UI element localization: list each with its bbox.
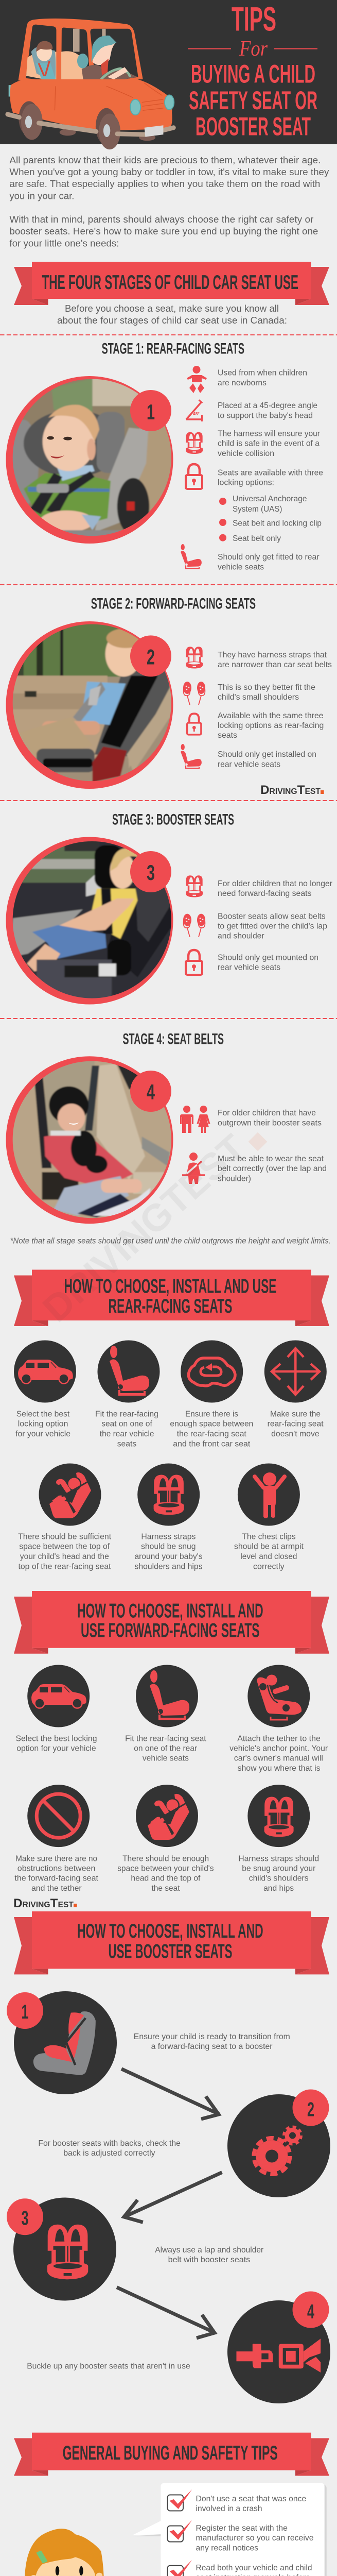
flow text 1: Ensure your child is ready to transition from bbox=[134, 2032, 290, 2041]
list text: and shoulder bbox=[218, 932, 264, 941]
ribbon heading: rear-facing bbox=[14, 1269, 329, 1326]
stage 2 number badge: 2 bbox=[147, 645, 155, 669]
number badge: 4 bbox=[307, 2301, 314, 2323]
step: fit on rear seat: seats bbox=[117, 1439, 136, 1448]
step text: rear-facing seat bbox=[268, 1420, 324, 1429]
step: seat doesn't move bbox=[264, 1341, 327, 1402]
list text: vehicle collision bbox=[218, 449, 274, 458]
header panel bbox=[0, 0, 337, 144]
step: head space: your child's head and the bbox=[20, 1552, 109, 1561]
step: attach tether: Attach the tether to the bbox=[237, 1734, 321, 1743]
tip 3 bbox=[168, 2560, 312, 2576]
logo: DrivingTest: DRIVINGTEST bbox=[13, 1896, 74, 1910]
number badge: 3 bbox=[22, 2207, 29, 2229]
step: fit on rear seat: the rear vehicle bbox=[100, 1430, 154, 1438]
step: harness snug: around your baby's bbox=[135, 1552, 203, 1561]
flow text 3: Always use a lap and shoulder bbox=[155, 2246, 264, 2255]
icon: harness bbox=[186, 432, 203, 454]
tip 1: Don't use a seat that was once bbox=[196, 2495, 306, 2503]
icon: lock bbox=[187, 714, 201, 735]
list text: Seats are available with three bbox=[218, 468, 323, 477]
step text: enough space between bbox=[170, 1420, 253, 1429]
icon: seat bbox=[181, 744, 202, 769]
icon: harness bbox=[186, 647, 203, 669]
step: fit on rear seat bbox=[95, 1341, 159, 1448]
list text bbox=[218, 879, 333, 972]
list text: seats bbox=[218, 731, 237, 740]
icon: baby bbox=[187, 366, 207, 393]
step: fit on rear seat bbox=[125, 1665, 206, 1763]
tip 1: involved in a crash bbox=[196, 2504, 262, 2513]
list text: For older children that no longer bbox=[218, 879, 333, 888]
list text: For older children that have bbox=[218, 1109, 316, 1117]
step: select locking option: for your vehicle bbox=[15, 1430, 70, 1438]
intro text bbox=[9, 155, 329, 249]
step: chest clips bbox=[234, 1463, 304, 1571]
step text: the rear-facing seat bbox=[177, 1430, 246, 1438]
step: fit on rear seat: vehicle seats bbox=[143, 1754, 189, 1763]
icon: 45 degree angle: 45° bbox=[193, 411, 200, 416]
step: no obstructions: the forward-facing seat bbox=[14, 1874, 98, 1883]
step: harness snug: shoulders and hips bbox=[135, 1562, 203, 1571]
number badge bbox=[7, 1992, 43, 2029]
icon: shoulders bbox=[183, 914, 205, 937]
list text: This is so they better fit the bbox=[218, 683, 315, 692]
step: select locking option: locking option bbox=[18, 1420, 68, 1429]
icon: 45 degree angle bbox=[186, 399, 203, 421]
flow text 2: back is adjusted correctly bbox=[63, 2149, 155, 2158]
list text: Seat belt only bbox=[233, 534, 281, 543]
tip 2: manufacturer so you can receive bbox=[196, 2534, 314, 2543]
subheading text: about the four stages of child car seat use in Canada: bbox=[57, 315, 287, 326]
ribbon heading: booster bbox=[14, 1911, 329, 1974]
flow step 2 bbox=[227, 2090, 330, 2197]
step: no obstructions: obstructions between bbox=[17, 1865, 95, 1873]
list text: Should only get mounted on bbox=[218, 953, 318, 962]
flow text 2 bbox=[38, 2139, 181, 2158]
step: enough head space: space between your child's bbox=[117, 1865, 214, 1873]
stage 1 list bbox=[181, 366, 323, 571]
step: head space: top of the rear-facing seat bbox=[19, 1562, 111, 1571]
list text: rear vehicle seats bbox=[218, 963, 280, 972]
step: harness snug: and hips bbox=[263, 1884, 294, 1893]
list text: Seat belt and locking clip bbox=[233, 519, 322, 528]
ribbon heading: four stages bbox=[14, 262, 329, 305]
list text: Should only get installed on bbox=[218, 750, 316, 759]
step: fit on rear seat: Fit the rear-facing seat bbox=[125, 1734, 206, 1743]
step: enough head space bbox=[117, 1785, 214, 1893]
rear-facing steps row 2 bbox=[18, 1463, 304, 1571]
flow text 2: For booster seats with backs, check the bbox=[38, 2139, 181, 2148]
step: select locking option: option for your vehicle bbox=[16, 1744, 96, 1753]
list text: Universal Anchorage bbox=[233, 495, 307, 503]
step: head space: space between the top of bbox=[19, 1543, 110, 1551]
step: fit on rear seat: Fit the rear-facing bbox=[95, 1410, 158, 1419]
illustration: car with parent and child bbox=[8, 19, 174, 149]
subheading text: Before you choose a seat, make sure you know all bbox=[65, 303, 279, 314]
tip 2: any recall notices bbox=[196, 2544, 258, 2552]
step: chest clips: should be at armpit bbox=[234, 1543, 304, 1551]
title: For bbox=[239, 37, 268, 61]
step: attach tether: show you where that is bbox=[238, 1764, 321, 1773]
stage 2 photo: boy in forward-facing seat bbox=[6, 621, 176, 789]
speech bubble with tips bbox=[132, 2483, 327, 2576]
list text: vehicle seats bbox=[218, 563, 264, 571]
watermark diamond bbox=[249, 1132, 267, 1151]
ribbon heading: rear-facing: REAR-FACING SEATS bbox=[108, 1295, 233, 1317]
icon: harness bbox=[186, 875, 203, 897]
tip 2: Register the seat with the bbox=[196, 2524, 288, 2533]
stage 1 photo: baby in rear-facing seat bbox=[6, 376, 176, 544]
ribbon heading: general tips bbox=[14, 2433, 329, 2476]
number badge: 1 bbox=[22, 2001, 29, 2023]
number badge bbox=[292, 2292, 329, 2328]
list text bbox=[218, 369, 323, 571]
arrow 1 bbox=[121, 2069, 219, 2119]
intro text: With that in mind, parents should always choose the right car safety or bbox=[9, 214, 313, 225]
number badge bbox=[7, 2198, 43, 2235]
tip 1 bbox=[168, 2489, 306, 2513]
stage 4 heading: STAGE 4: SEAT BELTS bbox=[122, 1030, 224, 1047]
step text: Ensure there is bbox=[185, 1410, 238, 1419]
list text: outgrown their booster seats bbox=[218, 1118, 322, 1127]
step: harness snug: Harness straps bbox=[141, 1533, 196, 1541]
title bbox=[188, 0, 317, 141]
forward-facing steps row 1 bbox=[15, 1665, 328, 1773]
intro text: are safe. That especially applies to when you take them on the road with bbox=[9, 179, 320, 189]
step: attach tether bbox=[229, 1665, 328, 1773]
rear-facing steps row 1 bbox=[14, 1341, 327, 1448]
ribbon heading: booster: USE BOOSTER SEATS bbox=[108, 1940, 233, 1962]
step: harness snug bbox=[238, 1785, 319, 1893]
icon: person wearing seat belt bbox=[182, 1153, 205, 1184]
icon: boy and girl bbox=[180, 1106, 210, 1133]
list text: to support the baby's head bbox=[218, 412, 313, 420]
step: select locking option bbox=[14, 1341, 76, 1438]
arrow 3 bbox=[117, 2287, 215, 2338]
step: fit on rear seat: on one of the rear bbox=[134, 1744, 198, 1753]
step: enough head space: the seat bbox=[151, 1884, 180, 1893]
list text: to get fitted over the child's lap bbox=[218, 922, 327, 930]
list text: belt correctly (over the lap and bbox=[218, 1164, 327, 1173]
watermark: DRIVINGTEST bbox=[34, 1126, 254, 1330]
logo: DrivingTest: DRIVINGTEST bbox=[260, 783, 321, 797]
stage 2 list bbox=[181, 647, 332, 769]
ribbon heading: forward-facing bbox=[14, 1591, 329, 1654]
stage 3 number badge bbox=[130, 851, 171, 892]
stage 3 heading: STAGE 3: BOOSTER SEATS bbox=[112, 811, 234, 828]
step: enough head space: head and the top of bbox=[131, 1874, 201, 1883]
flow step 3 bbox=[7, 2198, 116, 2301]
step: no obstructions: and the tether bbox=[31, 1884, 82, 1893]
step: attach tether: car's owner's manual will bbox=[234, 1754, 323, 1763]
step text: doesn't move bbox=[271, 1430, 320, 1438]
icon: harness bbox=[47, 2225, 88, 2279]
list text: Must be able to wear the seat bbox=[218, 1155, 324, 1163]
stage 4 number badge: 4 bbox=[147, 1080, 155, 1104]
tip 2 bbox=[168, 2520, 314, 2552]
subheading text bbox=[57, 303, 287, 326]
step: harness snug bbox=[135, 1463, 203, 1571]
step: chest clips: correctly bbox=[253, 1562, 285, 1571]
stage 4 number badge bbox=[130, 1071, 171, 1112]
step: select locking option: Select the best bbox=[16, 1410, 70, 1419]
step text: and the front car seat bbox=[173, 1439, 251, 1448]
list text: The harness will ensure your bbox=[218, 430, 321, 438]
intro text: booster seats. Here's how to make sure you end up buying the right one bbox=[9, 226, 318, 236]
list text: Used from when children bbox=[218, 369, 307, 378]
step: fit on rear seat: seat on one of bbox=[101, 1420, 152, 1429]
icon: lock bbox=[186, 950, 202, 975]
intro text: you in your car. bbox=[9, 191, 74, 201]
intro text: for your little one's needs: bbox=[9, 239, 119, 249]
flow text 1: a forward-facing seat to a booster bbox=[151, 2042, 273, 2051]
list text bbox=[218, 1109, 327, 1183]
number badge bbox=[292, 2090, 329, 2126]
stage 1 number badge: 1 bbox=[147, 400, 155, 424]
icon: shoulders bbox=[183, 682, 205, 705]
illustration: mother holding child bbox=[4, 2529, 165, 2576]
step: no obstructions: Make sure there are no bbox=[15, 1854, 97, 1863]
stage 3 photo: girl in booster seat bbox=[6, 837, 176, 1005]
step: head space bbox=[18, 1463, 112, 1571]
stage 4 photo: girl with seat belt bbox=[6, 1056, 176, 1224]
flow step 1 bbox=[7, 1991, 117, 2094]
number badge: 2 bbox=[307, 2099, 314, 2121]
list text: Placed at a 45-degree angle bbox=[218, 401, 317, 410]
flow text 3 bbox=[155, 2246, 264, 2264]
icon: lock bbox=[186, 464, 202, 489]
list text: are narrower than car seat belts bbox=[218, 660, 332, 669]
flow step 4 bbox=[227, 2292, 330, 2403]
stage 1 heading: STAGE 1: REAR-FACING SEATS bbox=[102, 341, 244, 358]
step: harness snug: Harness straps should bbox=[238, 1854, 319, 1863]
list text: Booster seats allow seat belts bbox=[218, 912, 326, 921]
icon: gears bbox=[254, 2127, 301, 2174]
intro text: All parents know that their kids are precious to them, whatever their age. bbox=[9, 155, 321, 165]
flow text 4: Buckle up any booster seats that aren't in use bbox=[27, 2362, 190, 2370]
forward-facing steps row 2 bbox=[14, 1785, 319, 1893]
step: harness snug: be snug around your bbox=[242, 1865, 316, 1873]
arrow 2 bbox=[124, 2173, 222, 2222]
flow text 3: belt with booster seats bbox=[168, 2256, 250, 2264]
step: chest clips: The chest clips bbox=[242, 1533, 296, 1541]
list text: rear vehicle seats bbox=[218, 760, 280, 769]
step: no obstructions bbox=[14, 1785, 98, 1893]
list text: locking options as rear-facing bbox=[218, 721, 324, 730]
note: *Note that all stage seats should get used until the child outgrows the height and weight limits. bbox=[10, 1237, 331, 1246]
step: harness snug: child's shoulders bbox=[249, 1874, 309, 1883]
list text bbox=[218, 651, 332, 769]
step: select locking option bbox=[15, 1665, 97, 1753]
list text: are newborns bbox=[218, 379, 267, 387]
stage 1 number badge bbox=[130, 390, 171, 431]
list text: They have harness straps that bbox=[218, 651, 327, 659]
list text: locking options: bbox=[218, 478, 274, 487]
list text: Available with the same three bbox=[218, 711, 324, 720]
icon: seat bbox=[181, 544, 202, 569]
list text: need forward-facing seats bbox=[218, 889, 312, 898]
step: harness snug: should be snug bbox=[141, 1543, 196, 1551]
step: enough head space: There should be enough bbox=[122, 1854, 209, 1863]
title: TIPS bbox=[232, 0, 276, 38]
icon: booster seat bbox=[33, 2011, 96, 2075]
list text: child's small shoulders bbox=[218, 693, 299, 702]
step text: Make sure the bbox=[270, 1410, 321, 1419]
step: enough space bbox=[181, 1341, 243, 1402]
stage 3 number badge: 3 bbox=[147, 860, 155, 885]
list text: shoulder) bbox=[218, 1174, 251, 1183]
step: chest clips: level and closed bbox=[240, 1552, 297, 1561]
tip 3: Read both your vehicle and child bbox=[196, 2564, 312, 2572]
step: attach tether: vehicle's anchor point. Your bbox=[229, 1744, 328, 1753]
list text: System (UAS) bbox=[233, 505, 282, 514]
icon: seat belt buckle bbox=[236, 2338, 321, 2372]
stage 4 list bbox=[180, 1106, 327, 1184]
stage 2 number badge bbox=[130, 635, 171, 676]
list text: Should only get fitted to rear bbox=[218, 553, 320, 562]
step text bbox=[170, 1410, 324, 1448]
intro text: When you've got a young baby or toddler in tow, it's vital to make sure they bbox=[9, 167, 329, 177]
flow text 1 bbox=[134, 2032, 290, 2051]
stage 3 list bbox=[183, 875, 333, 975]
list text: child is safe in the event of a bbox=[218, 439, 320, 448]
step: head space: There should be sufficient bbox=[18, 1533, 112, 1541]
step: select locking option: Select the best locking bbox=[15, 1734, 97, 1743]
